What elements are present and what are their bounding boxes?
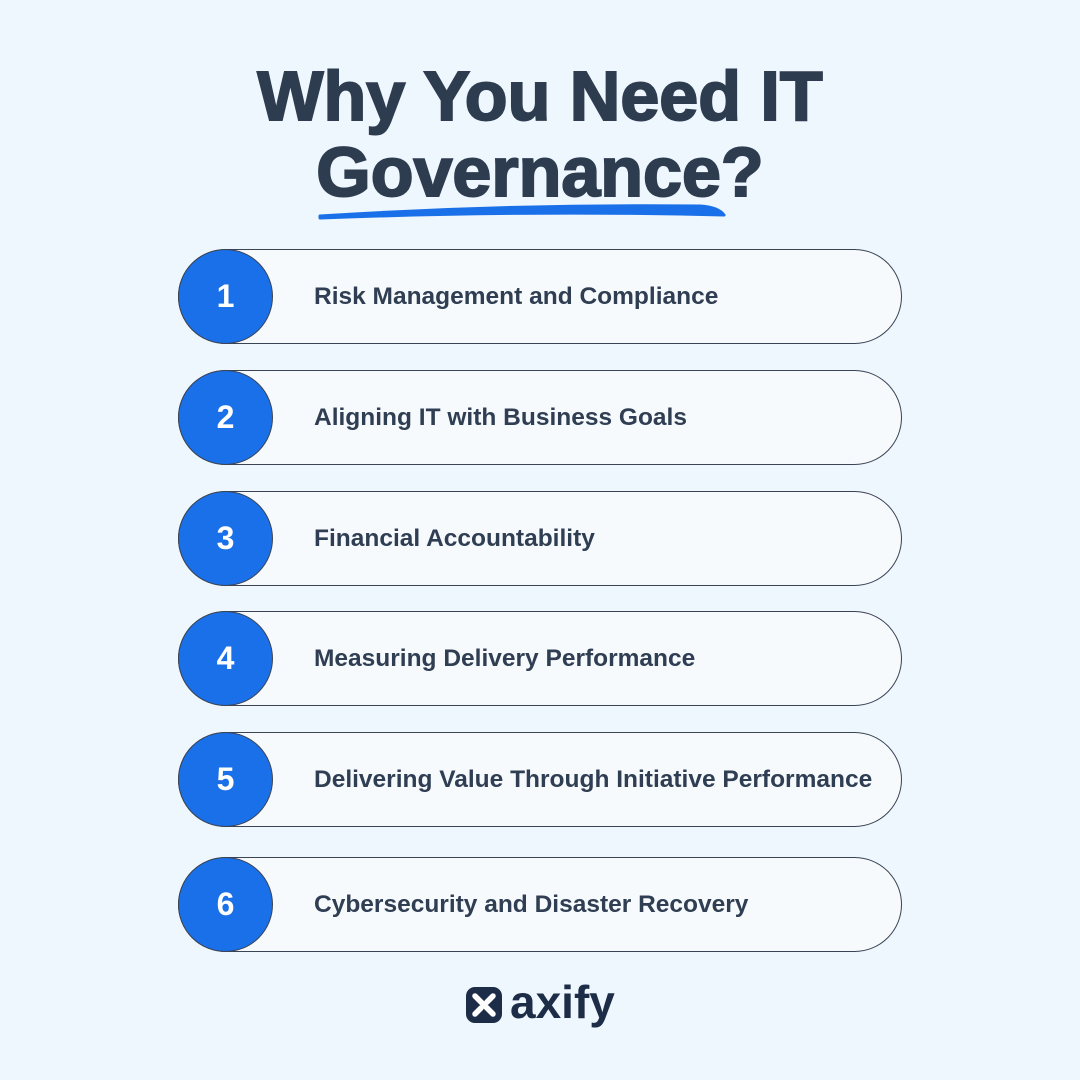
icon: axify mark bbox=[466, 987, 502, 1023]
item 3 bbox=[178, 491, 902, 586]
item 3: Financial Accountability bbox=[314, 525, 595, 552]
item 1: 1 bbox=[217, 278, 234, 314]
item 4: 4 bbox=[217, 640, 234, 676]
title underline bbox=[318, 204, 726, 220]
item 2: 2 bbox=[217, 399, 234, 435]
item 6 bbox=[178, 857, 902, 952]
item 6: 6 bbox=[217, 886, 234, 922]
item 4 bbox=[178, 611, 902, 706]
item 1: Risk Management and Compliance bbox=[314, 283, 718, 310]
item 5: Delivering Value Through Initiative Performance bbox=[314, 766, 872, 793]
item 2 bbox=[178, 370, 902, 465]
logo: axify bbox=[510, 976, 615, 1028]
item 6: Cybersecurity and Disaster Recovery bbox=[314, 891, 748, 918]
item 1 bbox=[178, 249, 902, 344]
item 5 bbox=[178, 732, 902, 827]
title: Why You Need IT bbox=[257, 57, 823, 135]
item 4: Measuring Delivery Performance bbox=[314, 645, 695, 672]
title: Governance? bbox=[316, 133, 764, 211]
item 2: Aligning IT with Business Goals bbox=[314, 404, 687, 431]
item 3: 3 bbox=[217, 520, 234, 556]
title bbox=[256, 57, 823, 211]
item 5: 5 bbox=[217, 761, 234, 797]
